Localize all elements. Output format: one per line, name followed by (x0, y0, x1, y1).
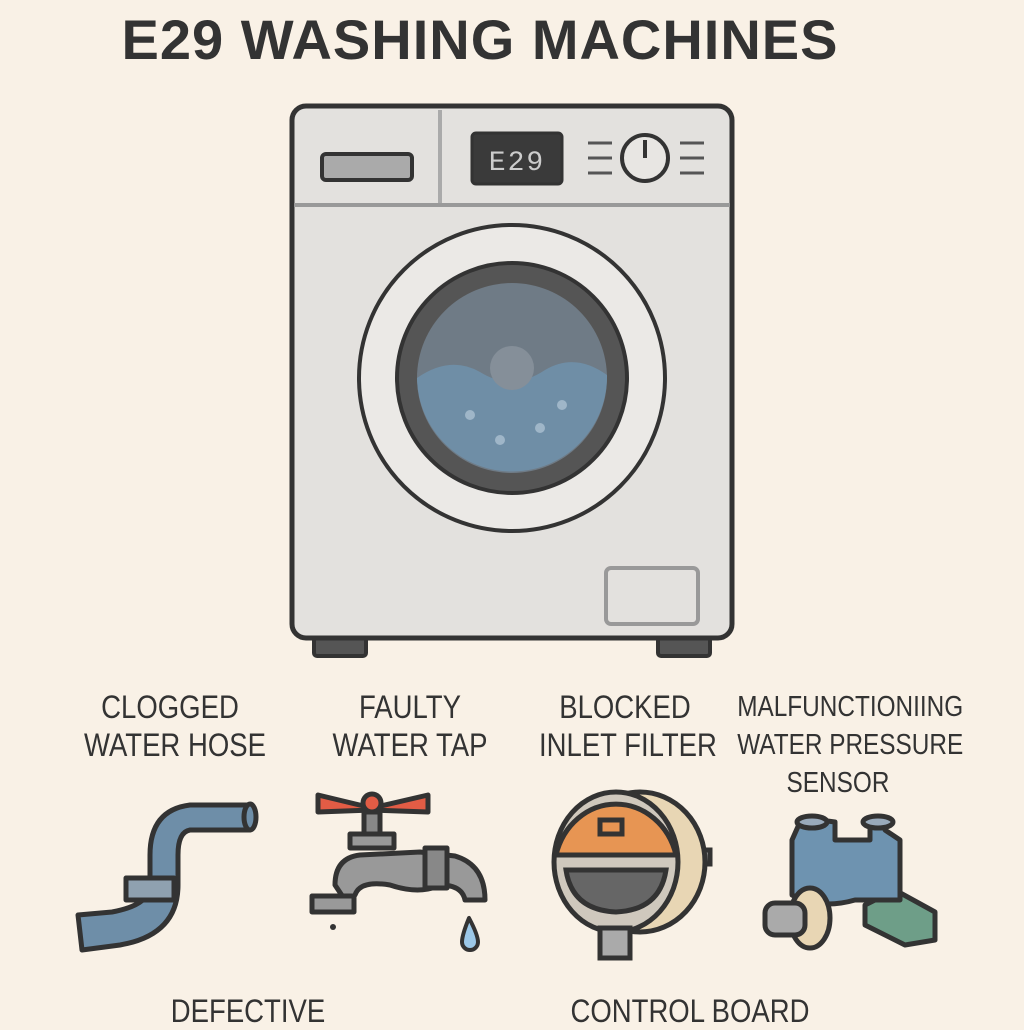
label: tap: FAULTY (359, 689, 461, 725)
label: tap (332, 689, 487, 763)
label: hose: WATER HOSE (84, 727, 266, 763)
display (472, 133, 562, 184)
icon: sensor (765, 816, 935, 948)
door (359, 225, 665, 531)
label: sensor (737, 691, 963, 799)
label: tap: WATER TAP (333, 727, 487, 763)
label: filter: INLET FILTER (539, 727, 717, 763)
icon: hose (78, 804, 256, 950)
washing machine: E29 (489, 148, 545, 179)
label: filter (539, 689, 717, 763)
icon: filter (554, 792, 710, 958)
feet (314, 632, 366, 656)
title: E29 WASHING MACHINES (122, 8, 838, 71)
knob (622, 135, 668, 181)
body (292, 106, 732, 638)
label: defective: DEFECTIVE (171, 993, 325, 1029)
panel (606, 568, 698, 624)
label: sensor: SENSOR (787, 767, 889, 799)
label: filter: BLOCKED (559, 689, 691, 725)
label: sensor: MALFUNCTIONIING (737, 691, 963, 723)
label: control board: CONTROL BOARD (570, 993, 810, 1029)
label: sensor: WATER PRESSURE (737, 729, 963, 761)
label: hose (84, 689, 266, 763)
label: hose: CLOGGED (101, 689, 239, 725)
icon: tap (312, 794, 485, 950)
